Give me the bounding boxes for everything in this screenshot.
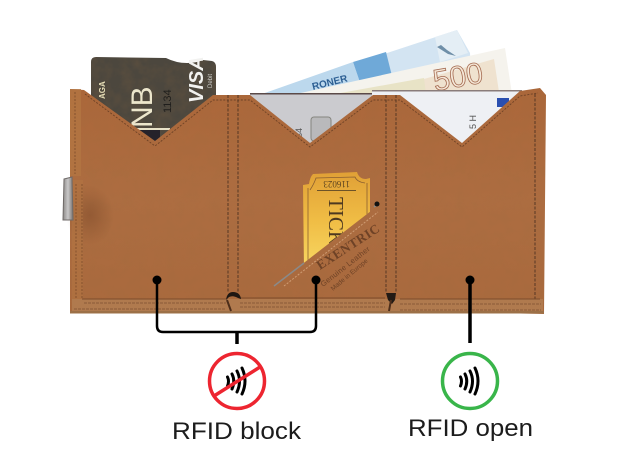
icon: beige banknote: 500: [430, 57, 486, 98]
icon: silver card: Is4: [294, 128, 304, 140]
icon: clasp: [63, 177, 73, 220]
wallet silhouette: [70, 88, 546, 314]
fold stitching: [228, 94, 535, 300]
icon: RFID open: [442, 354, 498, 408]
panel: leather wallet body: [66, 88, 546, 314]
icon: beige banknote: [296, 48, 512, 98]
icon: black bank card: AGA: [98, 81, 107, 99]
brand emboss: EXENTRIC: [313, 220, 383, 273]
icon: white card: [372, 90, 522, 151]
icon: black bank card: 1134: [162, 89, 174, 113]
fold notches: [226, 292, 241, 300]
icon: golden ticket: 116023: [323, 179, 350, 189]
left edge strip: [70, 89, 83, 311]
top edge stitching: [85, 93, 538, 147]
label: RFID open: RFID open: [408, 415, 533, 442]
icon: white card: 5 H: [468, 115, 478, 129]
icon: black bank card: Debit: [208, 74, 214, 88]
brand emboss: Genuine Leather: [319, 244, 372, 289]
connector line: RFID open: [466, 276, 474, 343]
icon: silver card: [250, 93, 375, 153]
icon: golden ticket: TICK: [324, 197, 348, 246]
bottom seam: [70, 298, 544, 314]
icon: black bank card: [91, 56, 216, 150]
icon: blue banknote: [262, 30, 472, 94]
brand emboss: Made in Europe: [330, 257, 370, 293]
icon: black bank card: NB: [126, 86, 159, 128]
flap stitching: [284, 212, 378, 286]
icon: black bank card: VISA: [186, 56, 208, 103]
clasp shadow: [66, 185, 114, 245]
pocket slit: [274, 204, 378, 286]
bracket connector: RFID block: [152, 276, 320, 344]
icon: RFID blocked: [210, 354, 264, 408]
icon: blue banknote: RONER: [311, 73, 350, 93]
leather grain: [70, 88, 546, 314]
label: RFID block: RFID block: [172, 418, 302, 445]
small anchor dot on ticket: [374, 202, 380, 206]
icon: golden ticket: [303, 172, 370, 270]
